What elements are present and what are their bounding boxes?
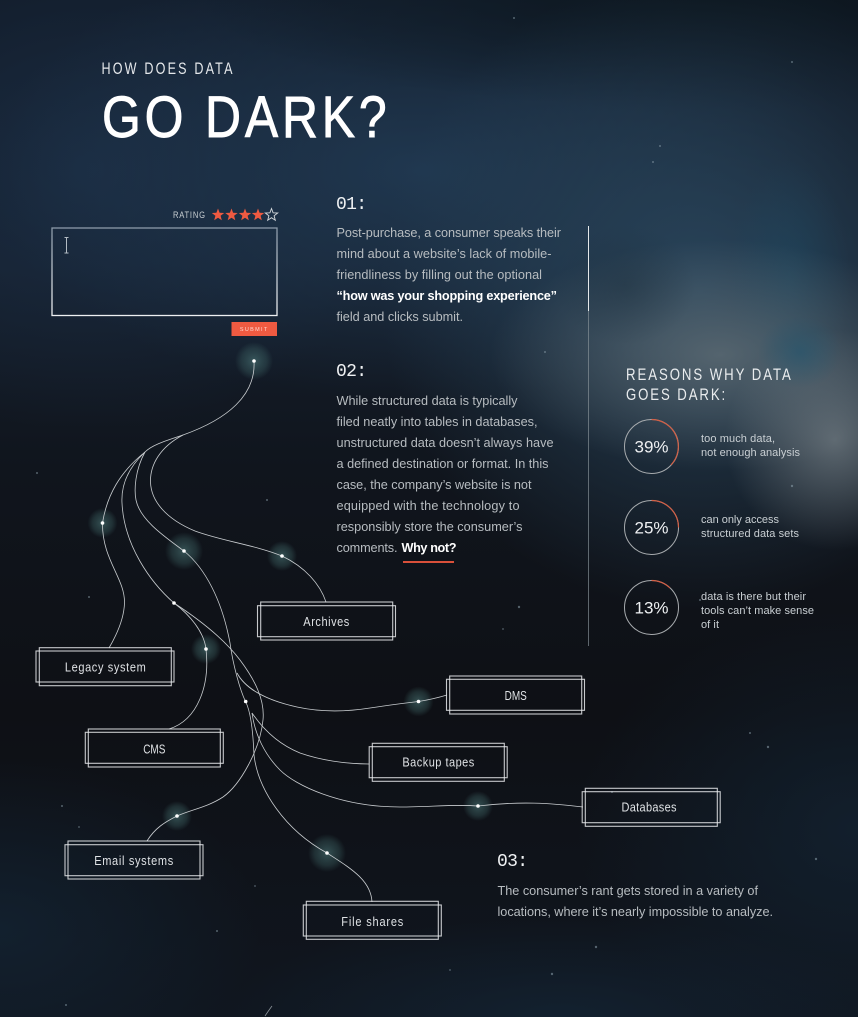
panel heading: REASONS WHY DATA bbox=[626, 366, 791, 384]
title bbox=[102, 59, 387, 150]
vertical divider bbox=[588, 226, 589, 646]
step text: equipped with the technology to bbox=[336, 499, 520, 513]
step text: field and clicks submit. bbox=[336, 310, 463, 324]
comment field bbox=[52, 228, 277, 316]
why not underline bbox=[403, 561, 454, 563]
stat 39% bbox=[624, 420, 800, 474]
stat 25%: 25% bbox=[634, 518, 669, 538]
step text: filed neatly into tables in databases, bbox=[336, 415, 538, 429]
box: legacy system bbox=[36, 648, 174, 686]
stat 39%: not enough analysis bbox=[701, 447, 800, 459]
submit button bbox=[232, 322, 277, 336]
stat 25%: can only access bbox=[701, 514, 780, 526]
stat 13%: of it bbox=[701, 619, 719, 631]
step 03 bbox=[497, 852, 773, 919]
box: email systems: Email systems bbox=[94, 854, 173, 868]
bottom curve fragment bbox=[265, 1006, 272, 1016]
box: backup tapes bbox=[369, 743, 507, 781]
step text: unstructured data doesn’t always have bbox=[336, 436, 554, 450]
submit button: SUBMIT bbox=[240, 327, 268, 333]
box: archives: Archives bbox=[303, 615, 349, 629]
step text: comments. bbox=[336, 541, 398, 555]
step text: locations, where it’s nearly impossible to analyze. bbox=[498, 905, 773, 919]
step text: mind about a website’s lack of mobile- bbox=[336, 247, 552, 261]
box: email systems bbox=[65, 841, 203, 879]
box: archives bbox=[258, 602, 396, 640]
step 02 bbox=[336, 362, 554, 563]
stat 25% bbox=[624, 500, 800, 554]
box: file shares bbox=[303, 901, 441, 939]
box: dms: DMS bbox=[505, 690, 527, 703]
stat 39%: too much data, bbox=[701, 433, 775, 445]
data flow network bbox=[36, 342, 720, 939]
step text: case, the company’s website is not bbox=[336, 478, 532, 492]
stat 39%: 39% bbox=[634, 438, 669, 456]
feedback form bbox=[52, 208, 278, 336]
box: databases: Databases bbox=[622, 801, 677, 815]
step text: Why not? bbox=[402, 541, 457, 555]
rating label: RATING bbox=[173, 209, 205, 220]
node dots bbox=[101, 359, 480, 855]
step number: 02: bbox=[336, 362, 367, 382]
box: legacy system: Legacy system bbox=[65, 661, 146, 675]
step 01 bbox=[336, 195, 562, 324]
step text: The consumer’s rant gets stored in a variety of bbox=[498, 884, 758, 898]
panel heading bbox=[626, 366, 791, 404]
step text bbox=[336, 226, 562, 324]
box: file shares: File shares bbox=[341, 915, 403, 929]
node glows bbox=[88, 342, 493, 872]
panel: reasons why data goes dark bbox=[624, 366, 814, 634]
main heading: GO DARK? bbox=[102, 86, 387, 150]
step text bbox=[336, 394, 554, 555]
stat 13% bbox=[624, 580, 814, 634]
panel heading: GOES DARK: bbox=[626, 386, 725, 404]
step number: 03: bbox=[497, 852, 528, 872]
step text: responsibly store the consumer’s bbox=[336, 520, 522, 534]
step text: “how was your shopping experience” bbox=[336, 289, 557, 303]
box: backup tapes: Backup tapes bbox=[402, 756, 474, 770]
box: cms bbox=[85, 729, 223, 767]
step number: 01: bbox=[336, 195, 367, 215]
stat 13%: tools can’t make sense bbox=[701, 605, 814, 617]
step text: Post-purchase, a consumer speaks their bbox=[336, 226, 562, 240]
step text: friendliness by filling out the optional bbox=[336, 268, 542, 282]
box: databases bbox=[582, 788, 720, 826]
box: dms bbox=[446, 676, 584, 714]
rating stars bbox=[212, 208, 278, 220]
stat 13%: 13% bbox=[634, 598, 669, 618]
step text bbox=[498, 884, 773, 919]
eyebrow heading: HOW DOES DATA bbox=[102, 59, 233, 79]
stat 13%: data is there but their bbox=[701, 591, 806, 603]
step text: While structured data is typically bbox=[336, 394, 518, 408]
text cursor bbox=[64, 238, 68, 253]
stat 25%: structured data sets bbox=[701, 528, 800, 540]
connecting curves bbox=[102, 361, 583, 902]
step text: a defined destination or format. In this bbox=[336, 457, 548, 471]
box: cms: CMS bbox=[143, 744, 166, 757]
